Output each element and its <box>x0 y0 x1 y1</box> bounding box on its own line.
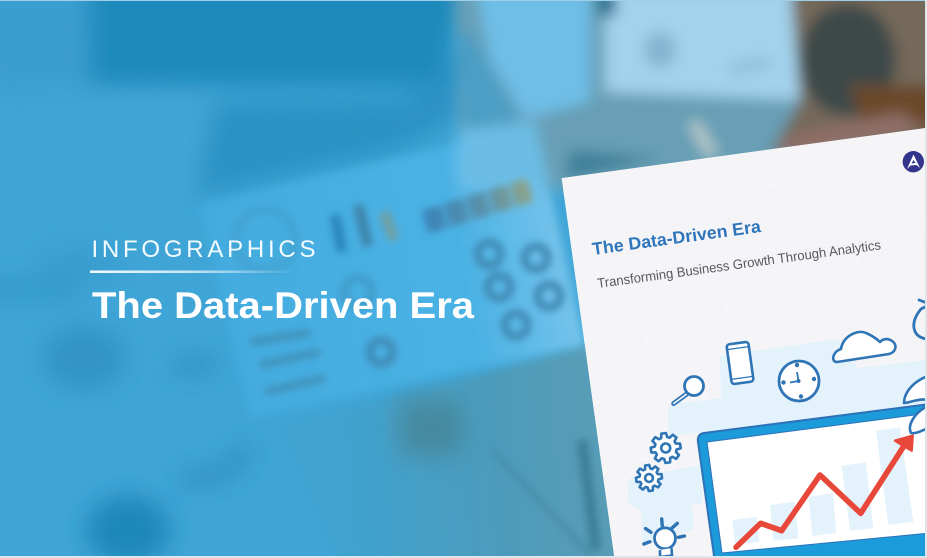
icon: clock <box>779 361 819 401</box>
monitor frame <box>698 404 927 558</box>
divider rule <box>90 270 296 273</box>
monitor with growth chart <box>698 404 927 558</box>
red trend line <box>736 442 907 547</box>
red arrow head <box>895 436 913 451</box>
icon: light bulb <box>644 519 684 557</box>
blurred bar chart <box>335 215 342 252</box>
icon: smartphone <box>726 342 754 384</box>
blurred report sheet <box>200 125 585 418</box>
blurred top right papers <box>455 0 927 190</box>
report cover page <box>562 128 927 558</box>
icon: leaves <box>904 376 927 433</box>
title: The Data-Driven Era: The Data-Driven Era <box>92 285 474 326</box>
blurred teal lower desk <box>283 345 650 558</box>
monitor screen <box>707 413 927 553</box>
pale background blobs <box>628 339 927 542</box>
cover subtitle: Transforming Business Growth Through Analytics <box>596 237 882 291</box>
icon: cloud <box>833 332 895 362</box>
icon: magnifier <box>674 376 704 404</box>
icon: small gear <box>634 463 664 493</box>
icon: large gear <box>649 431 682 465</box>
logo <box>903 151 924 172</box>
cover heading: The Data-Driven Era <box>591 216 762 259</box>
blurred donut charts <box>235 210 560 364</box>
heading: INFOGRAPHICS: INFOGRAPHICS <box>92 236 316 263</box>
pale column bars <box>732 427 913 545</box>
icon: money bag <box>914 300 927 339</box>
